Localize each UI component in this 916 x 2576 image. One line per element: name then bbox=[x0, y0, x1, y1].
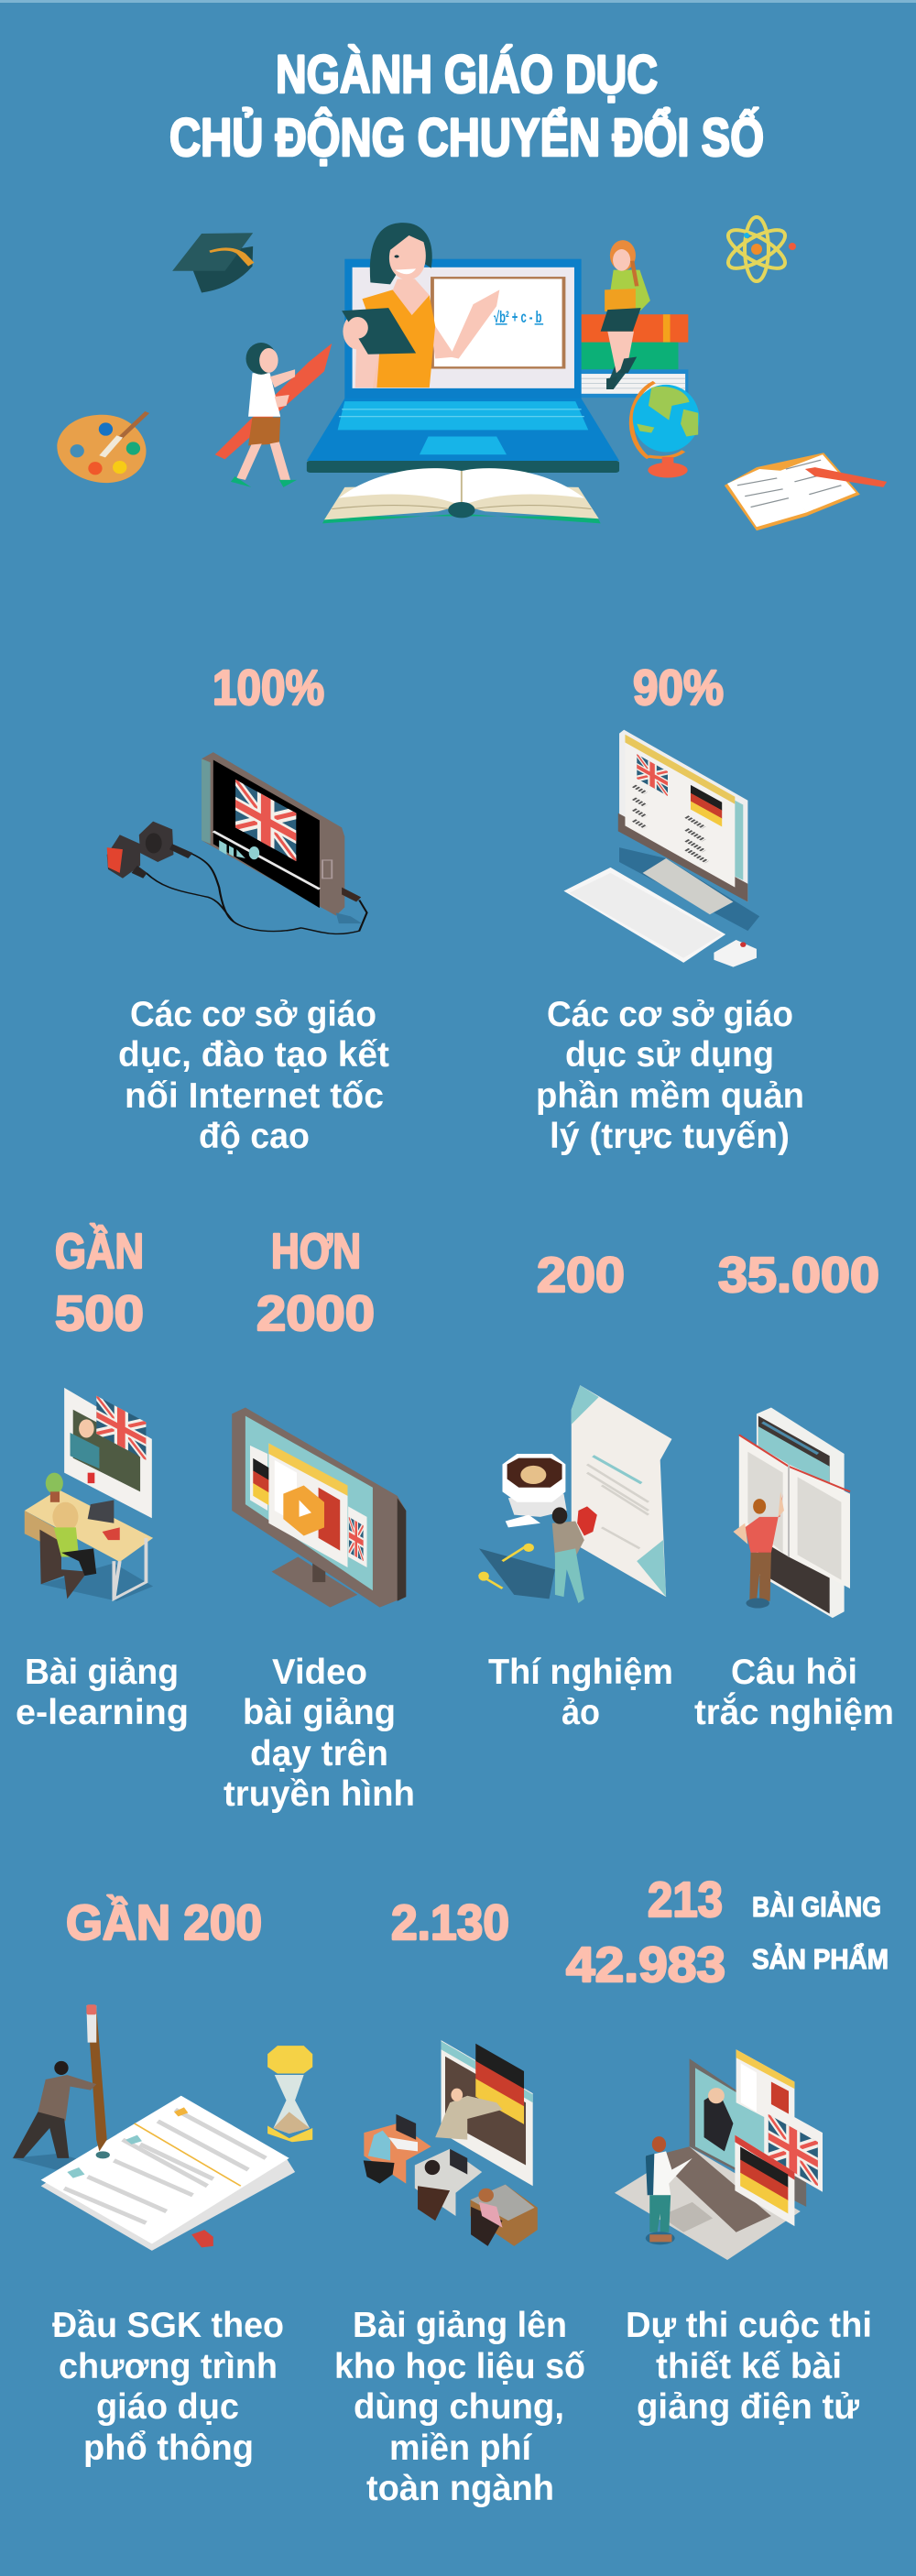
caption: contest: thiết kế bài bbox=[656, 2347, 842, 2386]
icon: hourglass bbox=[267, 2046, 312, 2142]
caption: internet bbox=[118, 995, 389, 1156]
stat: 213 lessons: BÀI GIẢNG bbox=[752, 1891, 881, 1923]
illustration: laptop bbox=[307, 259, 619, 473]
illustration: video phone with earbuds bbox=[107, 752, 367, 933]
icon: graduation cap bbox=[172, 233, 254, 292]
caption: video: bài giảng bbox=[243, 1693, 396, 1732]
stat: 90%: 90% bbox=[633, 660, 724, 715]
stat: 35.000: 35.000 bbox=[718, 1248, 879, 1303]
illustration: laptop contest bbox=[615, 2049, 823, 2260]
illustration: open book bbox=[322, 468, 601, 523]
stat: 100%: 100% bbox=[213, 660, 324, 715]
caption: video bbox=[224, 1653, 415, 1814]
illustration: video monitor bbox=[232, 1407, 406, 1608]
caption: textbooks: chương trình bbox=[59, 2347, 278, 2386]
illustration: teacher bbox=[342, 223, 499, 387]
caption: shared repository: kho học liệu số bbox=[334, 2347, 585, 2386]
caption: software: phần mềm quản bbox=[536, 1076, 804, 1116]
caption: shared repository: miền phí bbox=[389, 2429, 532, 2468]
illustration: boy with pencil bbox=[215, 343, 332, 487]
illustration: quiz book and phone bbox=[733, 1407, 850, 1618]
caption: video: Video bbox=[272, 1653, 367, 1692]
stat: 2.130: 2.130 bbox=[391, 1895, 509, 1950]
section: first stats row bbox=[213, 660, 724, 715]
whiteboard bbox=[432, 278, 563, 367]
caption: textbooks bbox=[52, 2306, 284, 2468]
stat: gần 500: GẦN bbox=[55, 1224, 144, 1279]
icon: paint palette bbox=[57, 412, 147, 483]
caption: software: Các cơ sở giáo bbox=[547, 995, 793, 1034]
stat: gần 500: 500 bbox=[55, 1286, 144, 1341]
title: CHỦ ĐỘNG CHUYỂN ĐỔI SỐ bbox=[169, 108, 764, 168]
caption: shared repository: dùng chung, bbox=[354, 2387, 564, 2427]
stat: gần 500 bbox=[55, 1224, 144, 1341]
icon: books stack bbox=[582, 314, 688, 398]
stat: 213 lessons: 213 bbox=[648, 1872, 723, 1927]
caption: internet: độ cao bbox=[199, 1117, 310, 1156]
illustration: virtual lab bbox=[478, 1385, 671, 1603]
caption: textbooks: giáo dục bbox=[96, 2387, 239, 2427]
icon: atom bbox=[723, 217, 796, 281]
caption: quiz questions: trắc nghiệm bbox=[694, 1692, 894, 1732]
stat: hơn 2000: 2000 bbox=[256, 1286, 375, 1341]
stat: 42.983 products bbox=[566, 1937, 889, 1992]
caption: shared repository: Bài giảng lên bbox=[353, 2306, 567, 2345]
stat: gần 200: GẦN 200 bbox=[66, 1895, 262, 1950]
caption: shared repository bbox=[334, 2306, 585, 2508]
caption: contest: Dự thi cuộc thi bbox=[626, 2306, 872, 2345]
caption: internet: nối Internet tốc bbox=[125, 1076, 384, 1116]
caption: internet: dục, đào tạo kết bbox=[118, 1035, 389, 1075]
caption: quiz questions bbox=[694, 1653, 894, 1732]
caption: software: dục sử dụng bbox=[565, 1035, 774, 1075]
stat: 213 lessons bbox=[648, 1872, 881, 1927]
caption: video: dạy trên bbox=[250, 1734, 388, 1774]
stat: hơn 2000 bbox=[256, 1224, 375, 1341]
stat: 200: 200 bbox=[537, 1248, 625, 1303]
caption: virtual experiments bbox=[488, 1653, 673, 1732]
caption: e-learning: e-learning bbox=[16, 1693, 189, 1732]
caption: contest: giảng điện tử bbox=[637, 2387, 860, 2427]
caption: contest bbox=[626, 2306, 872, 2427]
illustration: desktop computer bbox=[563, 730, 759, 967]
caption: video: truyền hình bbox=[224, 1774, 415, 1814]
hero illustration bbox=[57, 223, 887, 530]
caption: shared repository: toàn ngành bbox=[366, 2469, 554, 2508]
caption: virtual experiments: ảo bbox=[562, 1693, 600, 1732]
illustration: girl reading bbox=[601, 240, 650, 389]
icon: globe bbox=[631, 382, 699, 478]
caption: e-learning: Bài giảng bbox=[25, 1653, 179, 1692]
caption: textbooks: phổ thông bbox=[83, 2429, 254, 2468]
stat: 42.983 products: SẢN PHẨM bbox=[752, 1943, 889, 1975]
caption: software: lý (trực tuyến) bbox=[550, 1117, 790, 1156]
caption: e-learning bbox=[16, 1653, 189, 1732]
caption: quiz questions: Câu hỏi bbox=[731, 1653, 857, 1692]
stat: hơn 2000: HƠN bbox=[271, 1224, 361, 1279]
caption: software bbox=[536, 995, 804, 1156]
caption: virtual experiments: Thí nghiệm bbox=[488, 1653, 673, 1692]
whiteboard: √b² + c - b bbox=[494, 310, 542, 327]
caption: textbooks: Đầu SGK theo bbox=[52, 2306, 284, 2345]
illustration: textbook and pencil bbox=[12, 2004, 295, 2251]
icon: notebook and pencil bbox=[725, 453, 887, 530]
title bbox=[169, 45, 764, 168]
illustration: digital classroom bbox=[364, 2040, 538, 2246]
stat: 42.983 products: 42.983 bbox=[566, 1937, 725, 1992]
title: NGÀNH GIÁO DỤC bbox=[276, 45, 658, 104]
caption: internet: Các cơ sở giáo bbox=[130, 995, 376, 1034]
illustration: e-learning desk bbox=[25, 1388, 153, 1601]
